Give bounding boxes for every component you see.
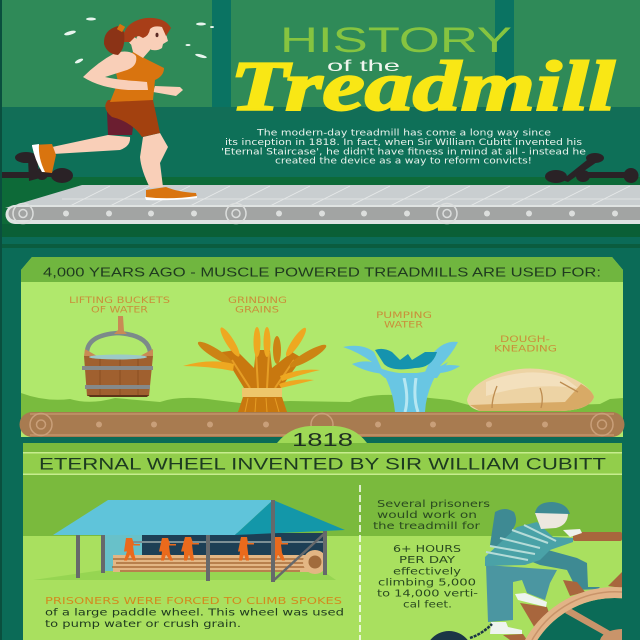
heading bands bbox=[23, 443, 622, 475]
hand bbox=[563, 529, 582, 537]
hours text: would work on bbox=[377, 510, 477, 521]
prisoners text: PRISONERS WERE FORCED TO CLIMB SPOKES bbox=[45, 596, 342, 607]
wheel spokes bbox=[565, 608, 610, 636]
dashed divider bbox=[359, 485, 361, 640]
ear bbox=[129, 37, 137, 45]
icon: wheat bbox=[183, 325, 328, 412]
title: Treadmill bbox=[230, 48, 615, 126]
labels: OF WATER bbox=[91, 306, 148, 316]
panel background bbox=[21, 257, 623, 437]
wheel paddles bbox=[503, 572, 622, 640]
prisoners text: of a large paddle wheel. This wheel was used bbox=[45, 608, 344, 618]
prisoner and wheel illustration bbox=[430, 502, 622, 640]
hills bbox=[21, 393, 623, 420]
intro text: its inception in 1818. In fact, when Sir William Cubitt invented his bbox=[225, 138, 582, 148]
front shoe bbox=[146, 187, 197, 199]
second prisoner bbox=[490, 509, 600, 590]
title: of the bbox=[327, 58, 400, 75]
panel: eternal wheel bbox=[23, 426, 622, 640]
wheat stalks bbox=[222, 350, 302, 412]
ball and chain bbox=[430, 631, 468, 640]
neck and face bbox=[130, 40, 150, 58]
labels: KNEADING bbox=[494, 344, 557, 354]
hours text: effectively bbox=[393, 566, 461, 578]
heading: 4,000 YEARS AGO - MUSCLE POWERED TREADMILLS ARE USED FOR: bbox=[43, 264, 601, 280]
right border bbox=[622, 443, 640, 640]
wooden bar bbox=[573, 532, 622, 541]
prisoners text: to pump water or crush grain. bbox=[45, 619, 241, 630]
wheel rim bbox=[525, 587, 622, 640]
back shoe bbox=[32, 144, 56, 173]
labels: LIFTING BUCKETS bbox=[69, 296, 170, 306]
labels bbox=[69, 296, 557, 354]
labels: GRINDING bbox=[228, 296, 287, 306]
icon: left dumbbell bbox=[2, 152, 73, 183]
far arm bbox=[153, 86, 183, 96]
icon: right dumbbell bbox=[545, 153, 638, 183]
heading: ETERNAL WHEEL INVENTED BY SIR WILLIAM CUBITT bbox=[39, 454, 606, 474]
back leg bbox=[52, 135, 130, 154]
intro text: created the device as a way to reform convicts! bbox=[275, 156, 532, 166]
figures bbox=[124, 537, 288, 560]
panel: muscle powered treadmills bbox=[20, 257, 624, 437]
panel background bbox=[23, 443, 622, 640]
title bbox=[230, 21, 615, 126]
labels: GRAINS bbox=[235, 306, 279, 316]
title: HISTORY bbox=[280, 21, 512, 60]
treadmill bbox=[5, 185, 640, 224]
hours text bbox=[373, 499, 490, 610]
hair bbox=[123, 18, 171, 42]
sweat drops bbox=[64, 18, 214, 64]
intro text: The modern-day treadmill has come a long way since bbox=[256, 128, 552, 138]
hours text: to 14,000 verti- bbox=[377, 588, 478, 600]
labels: WATER bbox=[384, 320, 423, 330]
labels: PUMPING bbox=[376, 311, 432, 321]
hours text: PER DAY bbox=[399, 555, 456, 566]
head and beard bbox=[535, 513, 568, 529]
striped torso bbox=[485, 522, 573, 566]
wheat tie bbox=[242, 388, 282, 397]
hours text: Several prisoners bbox=[377, 499, 490, 510]
hours text: climbing 5,000 bbox=[378, 578, 476, 588]
icon: water splash bbox=[343, 342, 460, 412]
roof bbox=[53, 500, 273, 535]
1818 tab: 1818 bbox=[292, 429, 353, 450]
hours text: cal feet. bbox=[403, 600, 452, 610]
front leg bbox=[140, 133, 168, 188]
tank top bbox=[110, 52, 164, 102]
legs bbox=[486, 565, 557, 622]
wooden belt bbox=[20, 412, 624, 437]
runner bbox=[32, 18, 214, 200]
posts bbox=[76, 500, 327, 582]
shoes bbox=[515, 593, 547, 607]
labels: DOUGH- bbox=[500, 335, 550, 345]
shorts bbox=[105, 100, 160, 137]
hours text: 6+ HOURS bbox=[393, 544, 461, 555]
prisoners text bbox=[45, 596, 344, 630]
icon: bucket bbox=[82, 316, 153, 397]
icon: dough bbox=[467, 368, 594, 411]
hours text: the treadmill for bbox=[373, 521, 481, 532]
1818 tab bbox=[277, 426, 367, 450]
intro text: 'Eternal Staircase', he didn't have fitness in mind at all - instead he bbox=[221, 148, 587, 158]
shed illustration bbox=[33, 500, 345, 582]
dark shorts bbox=[107, 112, 135, 135]
heading band bbox=[21, 257, 623, 282]
wheel opening bbox=[537, 598, 622, 640]
intro text bbox=[221, 128, 587, 166]
near arm bbox=[83, 52, 148, 90]
wheat ears bbox=[218, 325, 309, 359]
